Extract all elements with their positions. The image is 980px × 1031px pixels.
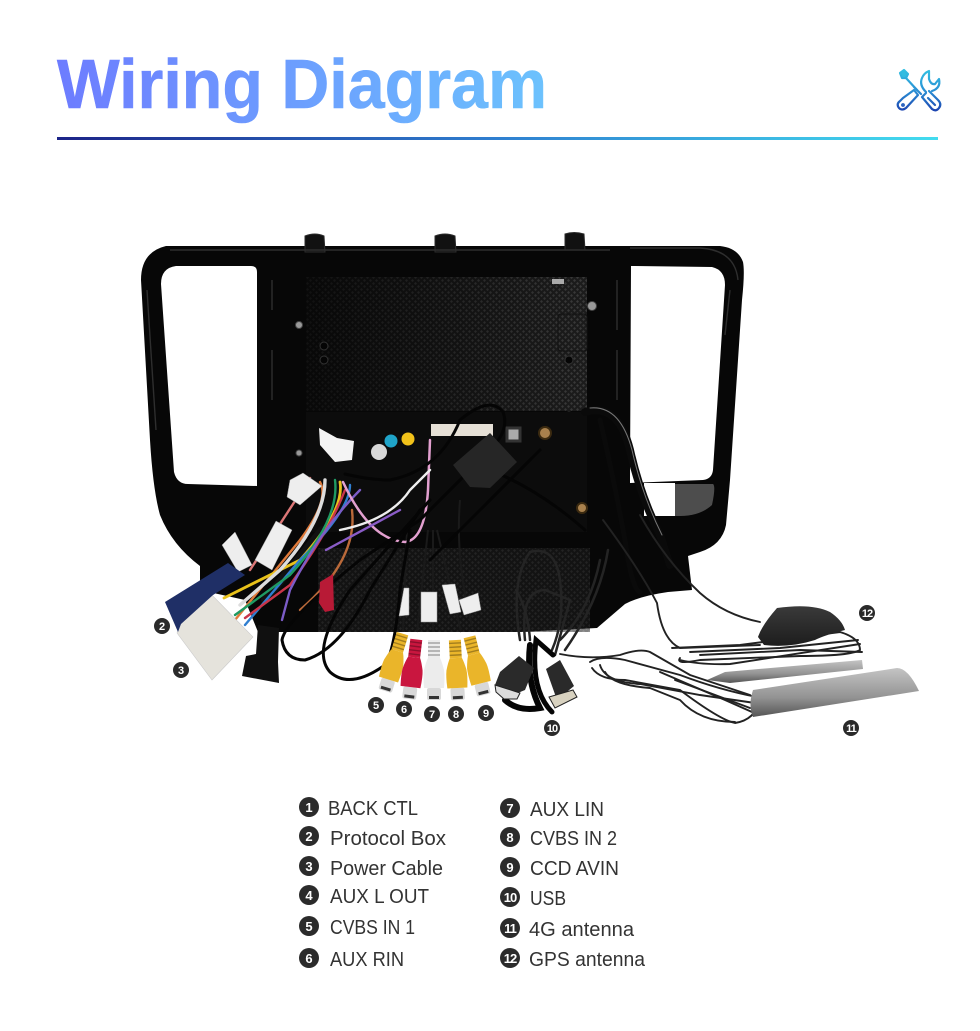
- USB connector right: [546, 660, 577, 708]
- legend: right column: 7: [506, 801, 514, 816]
- USB cables: [505, 550, 608, 712]
- legend: left column: 1: [305, 800, 313, 815]
- legend: right column: AUX LIN: [530, 799, 604, 821]
- USB connector left: [495, 656, 534, 699]
- legend: left column: AUX L OUT: [330, 886, 429, 908]
- photo callout numbers: 12: [862, 608, 873, 620]
- screen back panel: [306, 277, 587, 411]
- legend: right column: 4G antenna: [529, 919, 635, 941]
- protocol box: [165, 563, 245, 632]
- antenna box: [453, 433, 517, 488]
- photo callout numbers: 5: [373, 700, 379, 712]
- black loom: [282, 405, 585, 680]
- port connectors: [319, 424, 587, 513]
- GPS and 4G cables: [560, 515, 862, 723]
- legend: left column: 4: [305, 888, 313, 903]
- legend: left column: 3: [305, 859, 313, 874]
- legend: right column: USB: [530, 888, 566, 910]
- icon: crossed tools: [898, 70, 940, 110]
- lower carbon panel: [318, 548, 590, 632]
- legend: left column: [299, 797, 446, 971]
- photo callout numbers: 2: [159, 621, 165, 633]
- photo callout numbers: 8: [453, 709, 459, 721]
- photo callout numbers: 7: [429, 709, 435, 721]
- 4G antenna strip small: [707, 660, 863, 683]
- header rule: [57, 137, 938, 140]
- legend: right column: 12: [504, 951, 517, 966]
- stickers: [371, 432, 414, 460]
- legend: left column: 6: [305, 951, 313, 966]
- legend: left column: BACK CTL: [328, 798, 418, 820]
- photo callout numbers: 11: [846, 723, 857, 735]
- legend: left column: 5: [305, 919, 313, 934]
- GPS antenna: [758, 606, 845, 646]
- legend: right column: CVBS IN 2: [530, 828, 617, 850]
- photo callout numbers: 10: [547, 723, 558, 735]
- frame highlights: [147, 248, 738, 430]
- photo callout numbers: 6: [401, 704, 407, 716]
- head unit photo: [141, 232, 919, 723]
- panel: dash frame: [141, 246, 744, 632]
- legend: right column: 9: [506, 860, 514, 875]
- photo callout numbers: 3: [178, 665, 184, 677]
- photo callout numbers: [154, 605, 875, 736]
- legend: right column: [500, 798, 646, 971]
- legend: right column: 8: [506, 830, 514, 845]
- legend: left column: CVBS IN 1: [330, 917, 415, 939]
- ports area: [306, 412, 587, 532]
- RCA plugs: [375, 631, 494, 701]
- legend: right column: GPS antenna: [529, 949, 646, 971]
- legend: left column: Protocol Box: [330, 828, 446, 850]
- mounting clips: [305, 232, 585, 252]
- legend: left column: AUX RIN: [330, 949, 404, 971]
- photo callout numbers: 9: [483, 708, 489, 720]
- title: Wiring Diagram: [57, 45, 547, 123]
- grey bracket: [675, 484, 714, 516]
- white labels: [222, 473, 481, 622]
- legend: left column: 2: [305, 829, 313, 844]
- RCA cables: [403, 500, 472, 632]
- clip: red: [319, 574, 334, 612]
- cable bundle over right window: [585, 408, 670, 592]
- legend: right column: 10: [504, 890, 517, 905]
- power connector: [177, 595, 253, 680]
- legend: right column: CCD AVIN: [530, 858, 619, 880]
- legend: right column: 11: [504, 921, 517, 936]
- wiring harness: [224, 440, 430, 625]
- black connector: [242, 625, 279, 683]
- screws: [296, 302, 596, 456]
- lower cutout: [644, 483, 675, 516]
- 4G antenna strip large: [750, 668, 919, 717]
- legend: left column: Power Cable: [330, 858, 443, 880]
